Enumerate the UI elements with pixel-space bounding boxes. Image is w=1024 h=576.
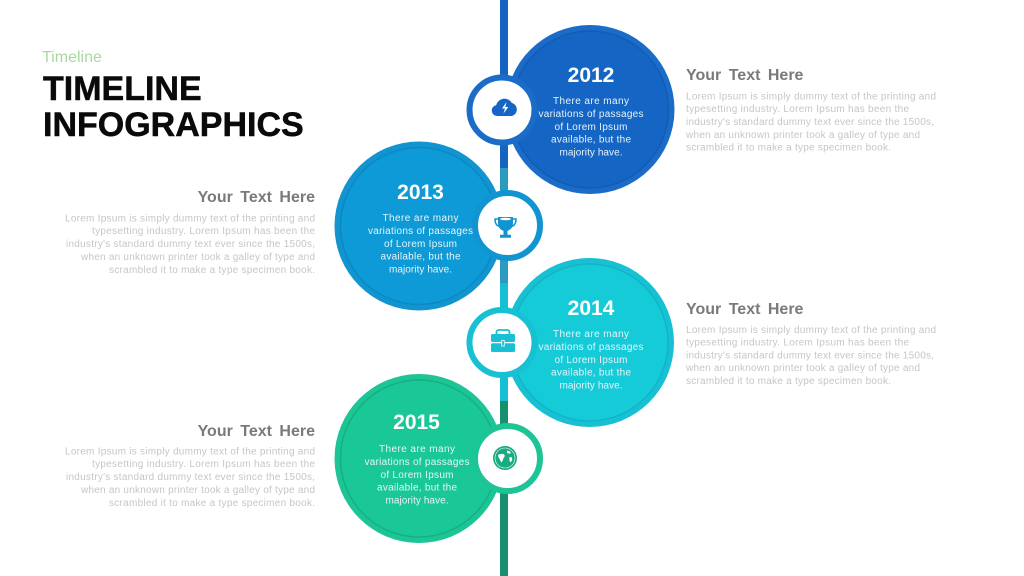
description 2012: available, but the <box>551 134 631 146</box>
description 2015: variations of passages <box>364 457 470 468</box>
heading 2013: Your Text Here <box>198 189 315 206</box>
description 2014 <box>538 329 644 392</box>
paragraph 2015: Lorem Ipsum is simply dummy text of the printing and <box>65 446 315 458</box>
heading 2012: Your Text Here <box>686 67 804 84</box>
icon: cloud with bolt <box>492 99 517 116</box>
title <box>43 70 304 144</box>
circle 2012 <box>506 25 674 194</box>
description 2014: There are many <box>553 329 629 340</box>
icon ring 2014 <box>470 310 534 375</box>
icon: globe <box>493 446 517 470</box>
icon: briefcase <box>491 330 515 352</box>
description 2012: There are many <box>553 96 629 107</box>
heading 2015: Your Text Here <box>198 423 315 440</box>
side text 2014 <box>685 301 936 387</box>
milestone 2015 <box>334 374 540 543</box>
side text 2015 <box>65 423 315 509</box>
paragraph 2012: when an unknown printer took a galley of type and <box>685 130 920 141</box>
paragraph 2012: Lorem Ipsum is simply dummy text of the printing and <box>686 92 936 102</box>
year 2013: 2013 <box>397 181 444 204</box>
paragraph 2012: industry's standard dummy text ever since the 1500s, <box>686 117 934 128</box>
description 2014: of Lorem Ipsum <box>554 355 628 366</box>
vertical timeline line <box>500 0 508 576</box>
description 2015: There are many <box>379 444 455 455</box>
milestone 2012 <box>470 25 674 194</box>
paragraph 2012 <box>685 92 936 154</box>
description 2013: of Lorem Ipsum <box>384 239 457 250</box>
paragraph 2013: Lorem Ipsum is simply dummy text of the printing and <box>65 214 315 224</box>
paragraph 2015 <box>65 446 315 509</box>
description 2013: variations of passages <box>368 226 473 237</box>
side text 2013 <box>65 189 315 276</box>
eyebrow label: Timeline <box>42 49 102 66</box>
icon ring 2012 <box>470 78 534 142</box>
description 2013: majority have. <box>389 264 452 276</box>
paragraph 2013: when an unknown printer took a galley of type and <box>80 252 315 263</box>
description 2014: variations of passages <box>538 342 644 353</box>
description 2015 <box>364 444 470 506</box>
description 2014: majority have. <box>560 380 622 392</box>
title: INFOGRAPHICS <box>43 106 304 144</box>
description 2012 <box>538 96 644 158</box>
description 2013 <box>368 213 473 276</box>
circle 2014 <box>505 258 674 427</box>
description 2015: majority have. <box>386 496 448 506</box>
paragraph 2015: when an unknown printer took a galley of type and <box>80 485 315 496</box>
paragraph 2014: when an unknown printer took a galley of type and <box>685 363 920 374</box>
paragraph 2014: Lorem Ipsum is simply dummy text of the printing and <box>686 325 936 336</box>
circle 2013 <box>334 142 504 310</box>
paragraph 2014: scrambled it to make a type specimen book. <box>686 376 891 387</box>
description 2013: available, but the <box>380 252 461 262</box>
icon ring 2013 <box>475 193 540 258</box>
description 2012: majority have. <box>560 148 622 158</box>
paragraph 2015: industry's standard dummy text ever since the 1500s, <box>66 472 315 483</box>
year 2012: 2012 <box>568 64 614 87</box>
heading 2014: Your Text Here <box>686 301 804 318</box>
paragraph 2013 <box>65 214 315 276</box>
paragraph 2013: industry's standard dummy text ever since the 1500s, <box>66 239 315 250</box>
icon ring 2015 <box>475 426 540 491</box>
description 2012: of Lorem Ipsum <box>554 122 628 133</box>
paragraph 2013: typesetting industry. Lorem Ipsum has been the <box>92 226 315 237</box>
paragraph 2015: typesetting industry. Lorem Ipsum has been the <box>92 459 315 470</box>
circle 2015 <box>334 374 504 543</box>
description 2013: There are many <box>382 213 458 224</box>
paragraph 2014: typesetting industry. Lorem Ipsum has been the <box>686 338 909 348</box>
milestone 2013 <box>334 142 540 310</box>
paragraph 2014 <box>685 325 936 387</box>
side text 2012 <box>685 67 936 154</box>
description 2015: available, but the <box>377 482 457 494</box>
description 2014: available, but the <box>551 368 631 378</box>
paragraph 2012: typesetting industry. Lorem Ipsum has been the <box>686 104 909 115</box>
milestone 2014 <box>470 258 674 427</box>
title: TIMELINE <box>43 70 202 108</box>
paragraph 2013: scrambled it to make a type specimen book. <box>109 265 315 276</box>
year 2015: 2015 <box>393 411 440 434</box>
paragraph 2014: industry's standard dummy text ever since the 1500s, <box>686 350 934 362</box>
year 2014: 2014 <box>568 297 615 320</box>
description 2015: of Lorem Ipsum <box>380 470 454 481</box>
paragraph 2012: scrambled it to make a type specimen book. <box>686 142 891 154</box>
paragraph 2015: scrambled it to make a type specimen book. <box>109 498 315 509</box>
description 2012: variations of passages <box>538 109 644 120</box>
icon: trophy <box>495 217 516 238</box>
